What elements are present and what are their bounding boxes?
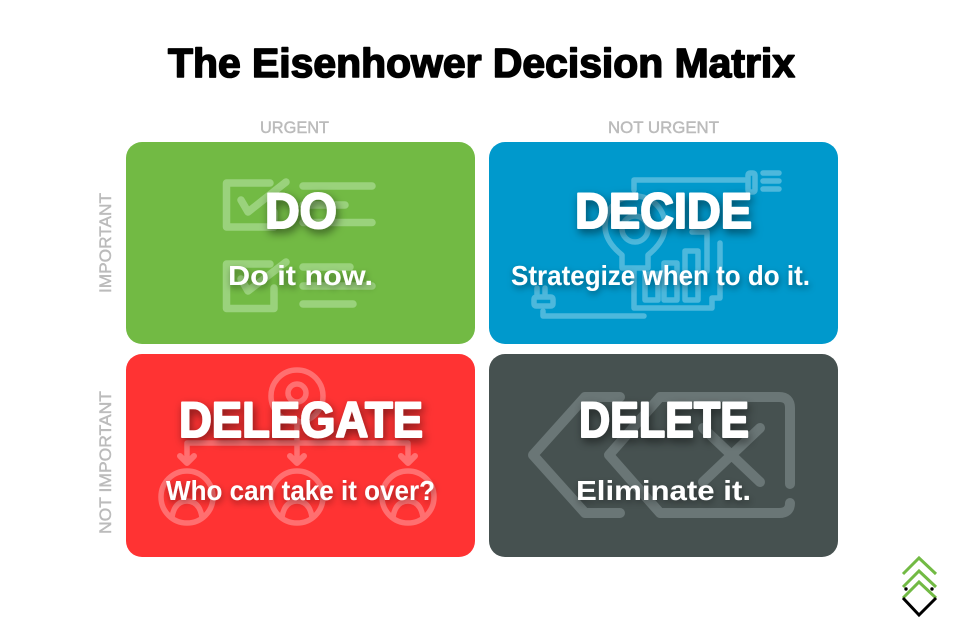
panel: do xyxy=(126,142,475,344)
icon: checklist xyxy=(226,182,372,308)
title: The Eisenhower Decision Matrix xyxy=(168,40,795,86)
text: do it now: Do it now. xyxy=(228,260,373,291)
icon: idea and chart xyxy=(534,173,779,316)
panel: delegate xyxy=(126,354,475,557)
text: who can take it over: Who can take it over? xyxy=(166,475,435,506)
panel: delete xyxy=(489,354,838,557)
heading: do: DO xyxy=(265,183,337,239)
heading: delegate: DELEGATE xyxy=(179,392,423,448)
panel: decide xyxy=(489,142,838,344)
row label: important: IMPORTANT xyxy=(96,193,115,293)
heading: decide: DECIDE xyxy=(575,183,752,239)
heading: delete: DELETE xyxy=(579,392,749,448)
text: eliminate it: Eliminate it. xyxy=(576,475,751,506)
column label: not urgent: NOT URGENT xyxy=(608,118,719,137)
text: strategize when to do it: Strategize when to do it. xyxy=(511,260,810,291)
icon: backspace xyxy=(533,397,790,513)
row label: not important: NOT IMPORTANT xyxy=(96,391,115,534)
icon: delegation tree xyxy=(161,370,434,523)
logo xyxy=(903,558,936,615)
column label: urgent: URGENT xyxy=(260,118,329,137)
